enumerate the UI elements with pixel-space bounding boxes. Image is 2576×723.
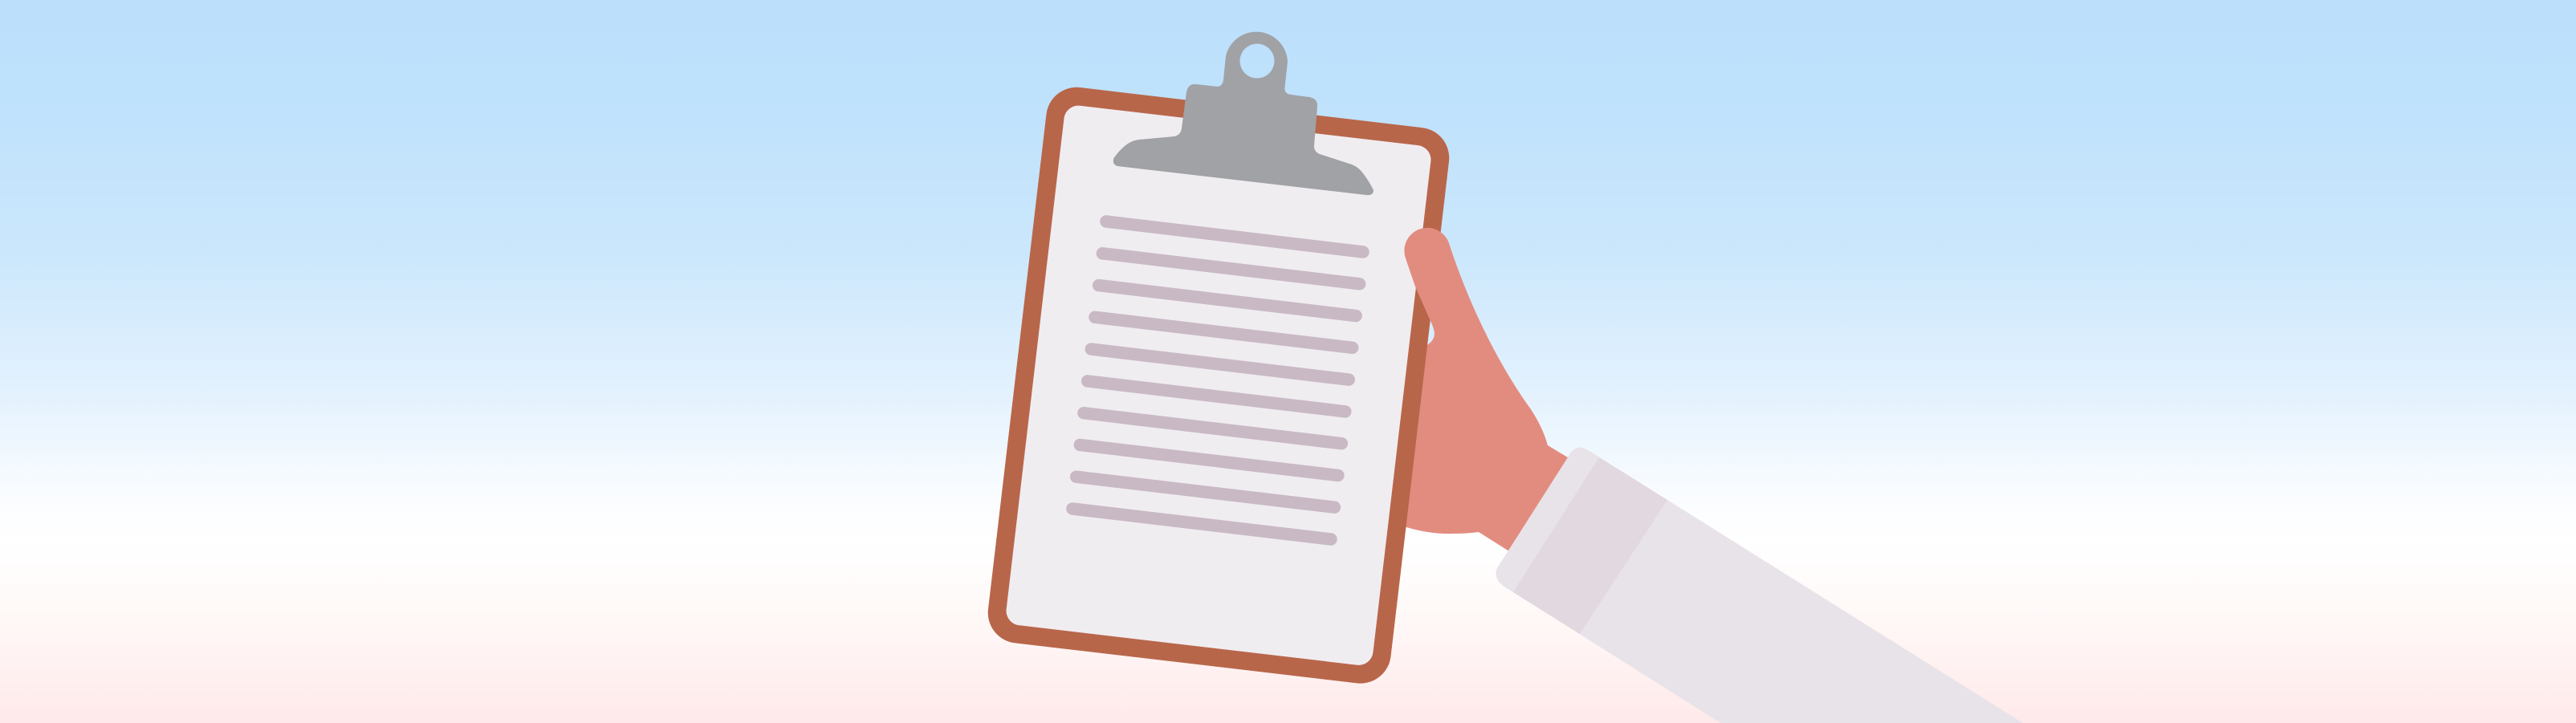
metal clip xyxy=(1113,32,1373,195)
paper sheet xyxy=(1005,104,1432,667)
sleeve body xyxy=(1496,448,2023,723)
clipboard board xyxy=(985,84,1452,687)
text lines on paper xyxy=(1072,221,1363,539)
cuff band xyxy=(1513,457,1667,634)
hand: thumb over clipboard xyxy=(1404,228,1531,409)
hand: palm behind clipboard xyxy=(1365,333,1573,551)
sleeve xyxy=(1496,448,2023,723)
clipboard xyxy=(985,32,1452,687)
